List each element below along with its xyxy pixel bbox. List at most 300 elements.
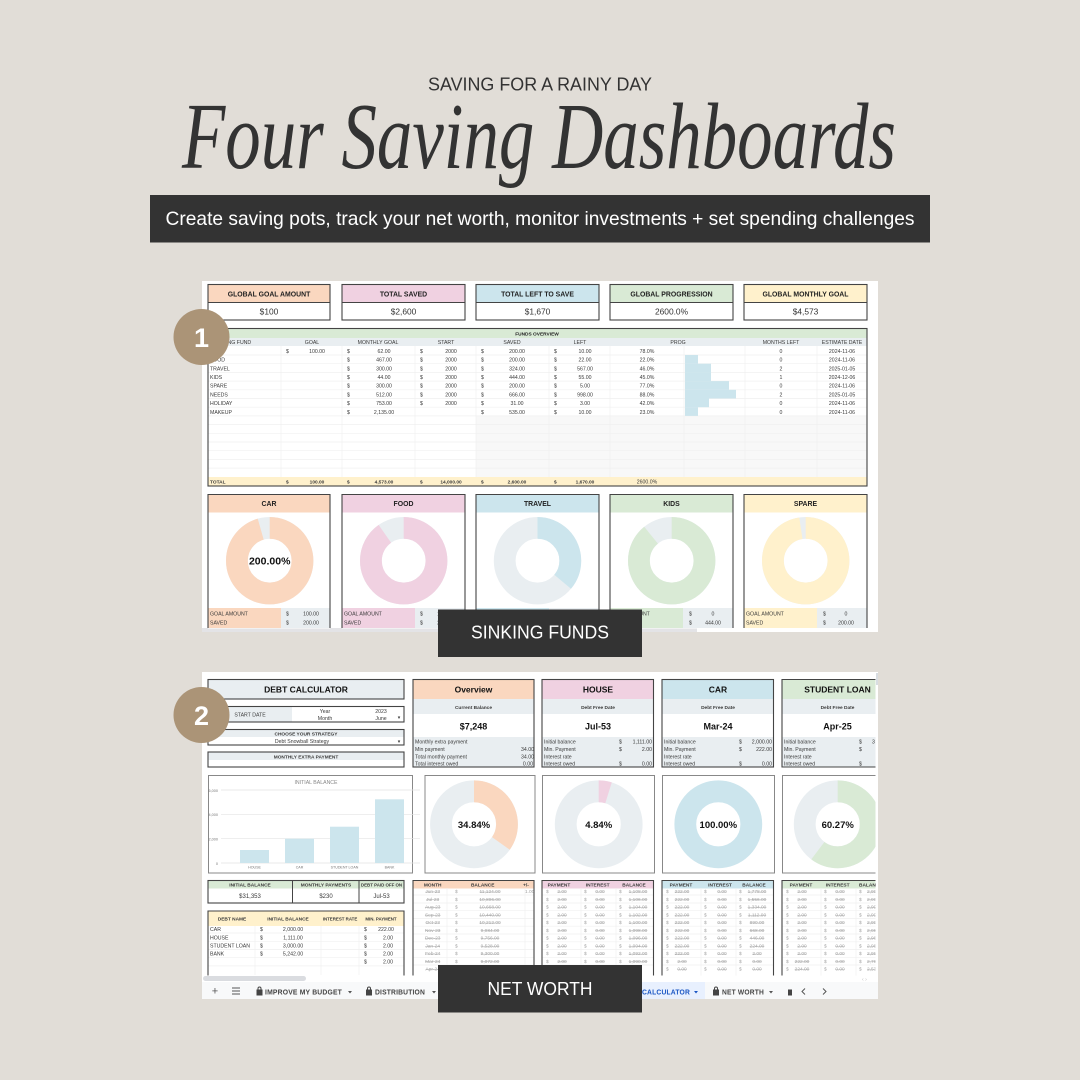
KPI: global goal amount	[208, 284, 330, 320]
card: house: HOUSE	[583, 684, 613, 694]
schedule: car: INTEREST	[708, 882, 732, 888]
schedule: car: 0.00	[717, 912, 727, 918]
schedule: month and balance: $	[455, 920, 458, 926]
table: funds overview: 200.00	[509, 384, 525, 390]
schedule: month and balance	[413, 880, 535, 976]
table: funds overview: $	[420, 358, 423, 364]
table: funds overview: 88.0%	[640, 392, 655, 398]
schedule: car: 0.00	[717, 936, 727, 942]
card: car: Interest owed	[664, 762, 695, 768]
schedule: car: 890.00	[750, 920, 765, 926]
table: funds overview: 2025-01-05	[829, 392, 855, 398]
table: debt list: STUDENT LOAN	[210, 944, 250, 950]
card: kids fund	[610, 494, 733, 628]
table: debt list: $	[364, 935, 367, 941]
schedule: student loan: $	[786, 912, 789, 918]
card: house: $	[619, 747, 622, 753]
schedule: month and balance: Feb-24	[425, 951, 441, 957]
table: funds overview: 2000	[445, 392, 457, 398]
table: funds overview: 31.00	[511, 401, 524, 407]
schedule: car: 0.00	[717, 928, 727, 934]
summary: balance, payments, paid off: INITIAL BALANCE	[229, 882, 272, 888]
schedule: student loan: $	[859, 904, 862, 910]
schedule: car: 222.00	[675, 912, 690, 918]
schedule: car: $	[666, 904, 669, 910]
KPI: total saved	[342, 284, 465, 320]
donut: house 4.84%	[542, 776, 654, 873]
schedule: student loan: 0.00	[835, 928, 845, 934]
table: funds overview: START	[438, 340, 455, 346]
schedule: student loan: $	[824, 928, 827, 934]
schedule: student loan: $	[786, 889, 789, 895]
table: funds overview: $	[554, 410, 557, 416]
schedule: month and balance: $	[455, 951, 458, 957]
card: spare fund: 200.00	[838, 620, 854, 626]
schedule: car: 1,556.00	[748, 897, 767, 903]
schedule: house: $	[584, 904, 587, 910]
table: funds overview: 535.00	[509, 410, 525, 416]
bar chart: initial balance: HOUSE	[248, 866, 261, 870]
table: funds overview: 444.00	[509, 375, 525, 381]
schedule: house: 1,098.00	[629, 928, 648, 934]
schedule: student loan: $	[824, 943, 827, 949]
schedule: car: 0.00	[717, 889, 727, 895]
schedule: house: 2.00	[557, 951, 567, 957]
schedule: house: 1,096.00	[629, 936, 648, 942]
schedule: house: $	[546, 936, 549, 942]
schedule: house: 0.00	[595, 904, 605, 910]
subtitle banner: Create saving pots, track your net worth, monitor investments + set spending challenges	[166, 208, 915, 230]
table: debt list: 5,242.00	[283, 952, 303, 958]
table: funds overview: 1,670.00	[576, 480, 595, 486]
table: funds overview: 2000	[445, 401, 457, 407]
KPI: total left to save: TOTAL LEFT TO SAVE	[501, 292, 574, 298]
panel: net worth dashboard	[202, 672, 898, 999]
schedule: month and balance: Oct-23	[425, 920, 440, 926]
table: funds overview: 998.00	[577, 392, 593, 398]
table: debt list: $	[364, 927, 367, 933]
table: funds overview: 4,573.00	[375, 480, 394, 486]
table: funds overview: $	[420, 401, 423, 407]
card: spare fund: 0	[845, 612, 848, 618]
schedule: house: 1,092.00	[629, 951, 648, 957]
schedule: house: 0.00	[595, 959, 605, 965]
schedule: car: 222.00	[675, 904, 690, 910]
table: funds overview: $	[420, 384, 423, 390]
schedule: student loan: $	[786, 928, 789, 934]
schedule: house: $	[619, 920, 622, 926]
schedule: student loan: $	[786, 904, 789, 910]
table: debt list: BANK	[210, 952, 225, 958]
table: funds overview: 55.00	[579, 375, 592, 381]
card: car: 0.00	[762, 762, 772, 768]
schedule: house: 2.00	[557, 928, 567, 934]
card: overview: Monthly extra payment	[415, 740, 468, 746]
schedule: car: 0.00	[717, 967, 727, 973]
schedule: student loan: 0.00	[835, 889, 845, 895]
donut: overview 34.84%	[425, 776, 535, 873]
table: funds overview: 1	[780, 375, 783, 381]
table: funds overview: 10.00	[579, 410, 592, 416]
table: funds overview: TOTAL	[210, 480, 226, 486]
schedule: house: 0.00	[595, 936, 605, 942]
schedule: student loan: $	[824, 904, 827, 910]
schedule: car: $	[704, 889, 707, 895]
schedule: house: 2.00	[557, 959, 567, 965]
schedule: student loan: 222.00	[795, 959, 810, 965]
schedule: house: 0.00	[595, 912, 605, 918]
schedule: house: 1,094.00	[629, 943, 648, 949]
donut: car 100%	[662, 776, 774, 873]
schedule: month and balance: 9,300.00	[481, 951, 500, 957]
schedule: student loan: $	[824, 951, 827, 957]
schedule: car: 0.00	[717, 920, 727, 926]
schedule: car: $	[704, 936, 707, 942]
debt calculator title	[208, 680, 404, 699]
schedule: house: 2.00	[557, 920, 567, 926]
table: debt list: 2.00	[383, 944, 393, 950]
schedule: house: $	[584, 897, 587, 903]
table: funds overview: $	[420, 349, 423, 355]
table: debt list: $	[260, 927, 263, 933]
table: funds overview: $	[554, 392, 557, 398]
schedule: month and balance: Jun-23	[425, 889, 440, 895]
table: funds overview: $	[347, 480, 350, 486]
schedule: house: 2.00	[557, 897, 567, 903]
schedule: month and balance: BALANCE	[471, 882, 495, 888]
monthly extra payment box: MONTHLY EXTRA PAYMENT	[274, 754, 338, 760]
table: funds overview: MAKEUP	[210, 410, 232, 416]
table: funds overview: LEFT	[574, 340, 587, 346]
table: funds overview: $	[481, 384, 484, 390]
card: food fund: 200.00	[437, 620, 453, 626]
KPI: global goal amount: GLOBAL GOAL AMOUNT	[228, 292, 311, 298]
summary: balance, payments, paid off	[208, 880, 404, 903]
table: funds overview: 666.00	[509, 392, 525, 398]
schedule: month and balance: Jul-23	[426, 897, 440, 903]
strategy selector	[208, 730, 404, 745]
schedule: house: 0.00	[595, 943, 605, 949]
KPI: global progression: GLOBAL PROGRESSION	[630, 292, 713, 298]
card: student loan: STUDENT LOAN	[804, 684, 871, 694]
schedule: car: $	[666, 897, 669, 903]
table: funds overview: 300.00	[376, 384, 392, 390]
schedule: car	[662, 880, 774, 976]
table: debt list: 3,000.00	[283, 944, 303, 950]
table: funds overview: 2024-11-06	[829, 358, 855, 364]
table: funds overview: 2	[780, 392, 783, 398]
schedule: student loan: $	[824, 920, 827, 926]
schedule: student loan: $	[786, 897, 789, 903]
schedule: student loan: 2,998.00	[867, 889, 886, 895]
table: debt list: CAR	[210, 927, 221, 933]
card: spare fund: SAVED	[746, 620, 763, 626]
card: overview: 34.00	[521, 747, 534, 753]
table: funds overview: 77.0%	[640, 384, 655, 390]
table: funds overview: 300.00	[376, 366, 392, 372]
table: funds overview: 2024-12-06	[829, 375, 855, 381]
card: car: Initial balance	[664, 740, 696, 746]
monthly extra payment box	[208, 752, 404, 767]
table: funds overview: 512.00	[376, 392, 392, 398]
table: funds overview: NEEDS	[210, 392, 228, 398]
schedule: house: 2.00	[557, 912, 567, 918]
schedule: house: $	[619, 928, 622, 934]
KPI: total saved: $2,600	[391, 306, 417, 316]
table: funds overview: 2025-01-05	[829, 366, 855, 372]
schedule: student loan: 2,984.00	[867, 943, 886, 949]
schedule: student loan: 2.00	[797, 897, 807, 903]
schedule: car: 446.00	[750, 936, 765, 942]
schedule: car: $	[739, 889, 742, 895]
horizontal scrollbar: ‹ ›	[862, 977, 867, 983]
schedule: student loan: 2,992.00	[867, 912, 886, 918]
card: car fund: 100.00	[303, 612, 319, 618]
table: funds overview: ESTIMATE DATE	[822, 340, 863, 346]
schedule: student loan: $	[824, 967, 827, 973]
schedule: house: 2.00	[557, 889, 567, 895]
badge: number 1	[174, 309, 230, 365]
table: debt list: $	[260, 952, 263, 958]
table: funds overview: $	[554, 375, 557, 381]
donut: car 100%: 100.00%	[700, 820, 738, 831]
schedule: house: 0.00	[595, 920, 605, 926]
donut: student loan 60.27%	[782, 776, 876, 873]
table: funds overview: $	[554, 349, 557, 355]
schedule: car: 0.00	[717, 951, 727, 957]
schedule: car: 2.00	[677, 959, 687, 965]
table: funds overview: $	[481, 349, 484, 355]
schedule: house: $	[619, 936, 622, 942]
table: funds overview: TRAVEL	[210, 366, 230, 372]
schedule: student loan: 2.00	[797, 943, 807, 949]
schedule: student loan: 2,988.00	[867, 928, 886, 934]
KPI: total left to save	[476, 284, 599, 320]
schedule: student loan: 2,760.00	[867, 959, 886, 965]
table: debt list: HOUSE	[210, 935, 229, 941]
table: funds overview: $	[347, 401, 350, 407]
schedule: house: INTEREST	[586, 882, 610, 888]
card: car fund: $	[286, 620, 289, 626]
schedule: car: 222.00	[675, 943, 690, 949]
schedule: car: $	[704, 897, 707, 903]
schedule: month and balance: $	[455, 897, 458, 903]
schedule: student loan: $	[859, 889, 862, 895]
table: funds overview: $	[554, 401, 557, 407]
summary: balance, payments, paid off: MONTHLY PAYMENTS	[301, 882, 352, 888]
schedule: car: PAYMENT	[670, 882, 692, 888]
table: funds overview: 2,135.00	[374, 410, 394, 416]
schedule: month and balance: $	[455, 928, 458, 934]
kicker: saving for a rainy day: SAVING FOR A RAINY DAY	[428, 74, 652, 94]
schedule: month and balance: Mar-24	[425, 959, 441, 965]
horizontal scrollbar	[202, 976, 878, 983]
schedule: house: $	[546, 959, 549, 965]
schedule: student loan: $	[859, 897, 862, 903]
start date box: June	[375, 716, 387, 722]
schedule: student loan: 224.00	[795, 967, 810, 973]
bar chart: initial balance: 2,000	[208, 838, 218, 842]
schedule: car: $	[666, 928, 669, 934]
table: funds overview: 2024-11-06	[829, 384, 855, 390]
table: funds overview: FOOD	[210, 358, 225, 364]
schedule: student loan	[782, 880, 886, 976]
schedule: house: 1,104.00	[629, 904, 648, 910]
schedule: house: $	[546, 897, 549, 903]
card: overview: 34.00	[521, 754, 534, 760]
card: car fund: SAVED	[210, 620, 227, 626]
table: funds overview: 44.00	[378, 375, 391, 381]
table: funds overview: 23.0%	[640, 410, 655, 416]
label: sinking funds: SINKING FUNDS	[471, 622, 609, 642]
bar chart: initial balance: 4,000	[208, 813, 218, 817]
progress bars	[685, 355, 736, 416]
card: car: $	[739, 747, 742, 753]
schedule: car: 0.00	[752, 967, 762, 973]
schedule: house: $	[619, 959, 622, 965]
schedule: student loan: 2,536.00	[867, 967, 886, 973]
KPI: global monthly goal: $4,573	[793, 306, 819, 316]
KPI: global goal amount: $100	[260, 306, 279, 316]
schedule: student loan: $	[859, 912, 862, 918]
card: overview	[413, 680, 534, 768]
table: funds overview: 2600.0%	[637, 480, 658, 486]
schedule: student loan: 2,990.00	[867, 920, 886, 926]
table: debt list: $	[364, 960, 367, 966]
schedule: car: 222.00	[675, 889, 690, 895]
schedule: car: $	[666, 889, 669, 895]
card: food fund: FOOD	[394, 501, 413, 508]
card: student loan: $	[859, 762, 862, 768]
schedule: car: $	[739, 951, 742, 957]
card: spare fund: SPARE	[794, 501, 818, 508]
card: overview: Current Balance	[455, 705, 492, 711]
table: funds overview: $	[420, 375, 423, 381]
table: funds overview: SPARE	[210, 384, 228, 390]
sheet tabs bar	[202, 982, 878, 999]
schedule: car: 222.00	[675, 897, 690, 903]
card: house: 1,111.00	[633, 740, 652, 746]
table: funds overview: 200.00	[509, 358, 525, 364]
card: house: Interest owed	[544, 762, 575, 768]
donut: house 4.84%: 4.84%	[585, 820, 613, 831]
schedule: month and balance: $	[455, 943, 458, 949]
KPI: global progression: 2600.0%	[655, 306, 689, 316]
table: funds overview: 2000	[445, 384, 457, 390]
table: funds overview: $	[481, 480, 484, 486]
table: funds overview: SINKING FUND	[214, 340, 251, 346]
schedule: student loan: $	[859, 959, 862, 965]
schedule: car: 224.00	[750, 943, 765, 949]
label: sinking funds	[438, 610, 642, 657]
schedule: month and balance: Sep-23	[425, 912, 441, 918]
schedule: house: $	[546, 943, 549, 949]
schedule: month and balance: 8,844.00	[481, 967, 500, 973]
card: student loan: Apr-25	[823, 722, 852, 732]
card: house: Initial balance	[544, 740, 576, 746]
KPI: global monthly goal	[744, 284, 867, 320]
card: food fund: $	[420, 620, 423, 626]
card: car fund: $	[286, 612, 289, 618]
schedule: house: 1,100.00	[629, 920, 648, 926]
schedule: month and balance: Nov-23	[425, 928, 441, 934]
schedule: car: $	[739, 912, 742, 918]
table: funds overview: PROG	[670, 340, 686, 346]
card: spare fund: $	[823, 612, 826, 618]
card: overview: Min payment	[415, 747, 445, 753]
table: funds overview: CAR	[210, 349, 221, 355]
schedule: car: $	[739, 936, 742, 942]
card: car: Min. Payment	[664, 747, 696, 753]
tab: distribution: DISTRIBUTION	[375, 988, 425, 996]
card: spare fund: GOAL AMOUNT	[746, 612, 785, 618]
schedule: student loan: $	[859, 967, 862, 973]
card: car fund: GOAL AMOUNT	[210, 612, 249, 618]
schedule: student loan: $	[786, 936, 789, 942]
schedule: student loan: $	[786, 920, 789, 926]
card: kids fund: 444.00	[705, 620, 721, 626]
table: funds overview: 100.00	[310, 480, 325, 486]
table: funds overview: $	[481, 410, 484, 416]
schedule: car: $	[666, 943, 669, 949]
card: student loan: Interest owed	[784, 762, 815, 768]
schedule: house: $	[584, 889, 587, 895]
schedule: car: $	[739, 904, 742, 910]
card: house: Jul-53	[585, 722, 611, 732]
start date box: 2023	[375, 709, 387, 715]
KPI: total left to save: $1,670	[525, 306, 551, 316]
schedule: house: 2.00	[557, 943, 567, 949]
card: car: $	[739, 762, 742, 768]
card: food fund	[342, 494, 465, 628]
table: funds overview: $	[286, 349, 289, 355]
table: funds overview: $	[420, 392, 423, 398]
card: food fund: GOAL AMOUNT	[344, 612, 383, 618]
table: funds overview: $	[554, 358, 557, 364]
table: funds overview: 2,600.00	[508, 480, 527, 486]
schedule: car: $	[666, 912, 669, 918]
schedule: car: $	[666, 920, 669, 926]
schedule: month and balance: $	[455, 959, 458, 965]
schedule: student loan: $	[824, 959, 827, 965]
schedule: month and balance: 9,756.00	[481, 936, 500, 942]
table: funds overview: MONTHS LEFT	[763, 340, 800, 346]
panel: sinking funds dashboard	[202, 281, 878, 632]
schedule: car: 0.00	[717, 897, 727, 903]
schedule: car: 1,778.00	[748, 889, 767, 895]
summary: balance, payments, paid off: $31,353	[239, 894, 262, 900]
badge: number 2: 2	[194, 701, 209, 731]
schedule: month and balance: 9,072.00	[481, 959, 500, 965]
table: debt list: $	[364, 952, 367, 958]
schedule: student loan: $	[824, 936, 827, 942]
table: debt list: $	[260, 935, 263, 941]
schedule: car: 0.00	[677, 967, 687, 973]
table: funds overview: 0	[780, 384, 783, 390]
bar chart: initial balance: BANK	[385, 866, 395, 870]
table: funds overview: 2000	[445, 366, 457, 372]
card: car: Debt Free Date	[701, 705, 735, 711]
card: food fund: 100.00	[437, 612, 453, 618]
schedule: student loan: 2,986.00	[867, 936, 886, 942]
schedule: student loan: 0.00	[835, 951, 845, 957]
schedule: car: 0.00	[717, 959, 727, 965]
schedule: car: 222.00	[675, 951, 690, 957]
schedule: student loan: 0.00	[835, 904, 845, 910]
schedule: house: $	[584, 943, 587, 949]
schedule: student loan: $	[859, 920, 862, 926]
card: spare fund	[744, 494, 867, 628]
